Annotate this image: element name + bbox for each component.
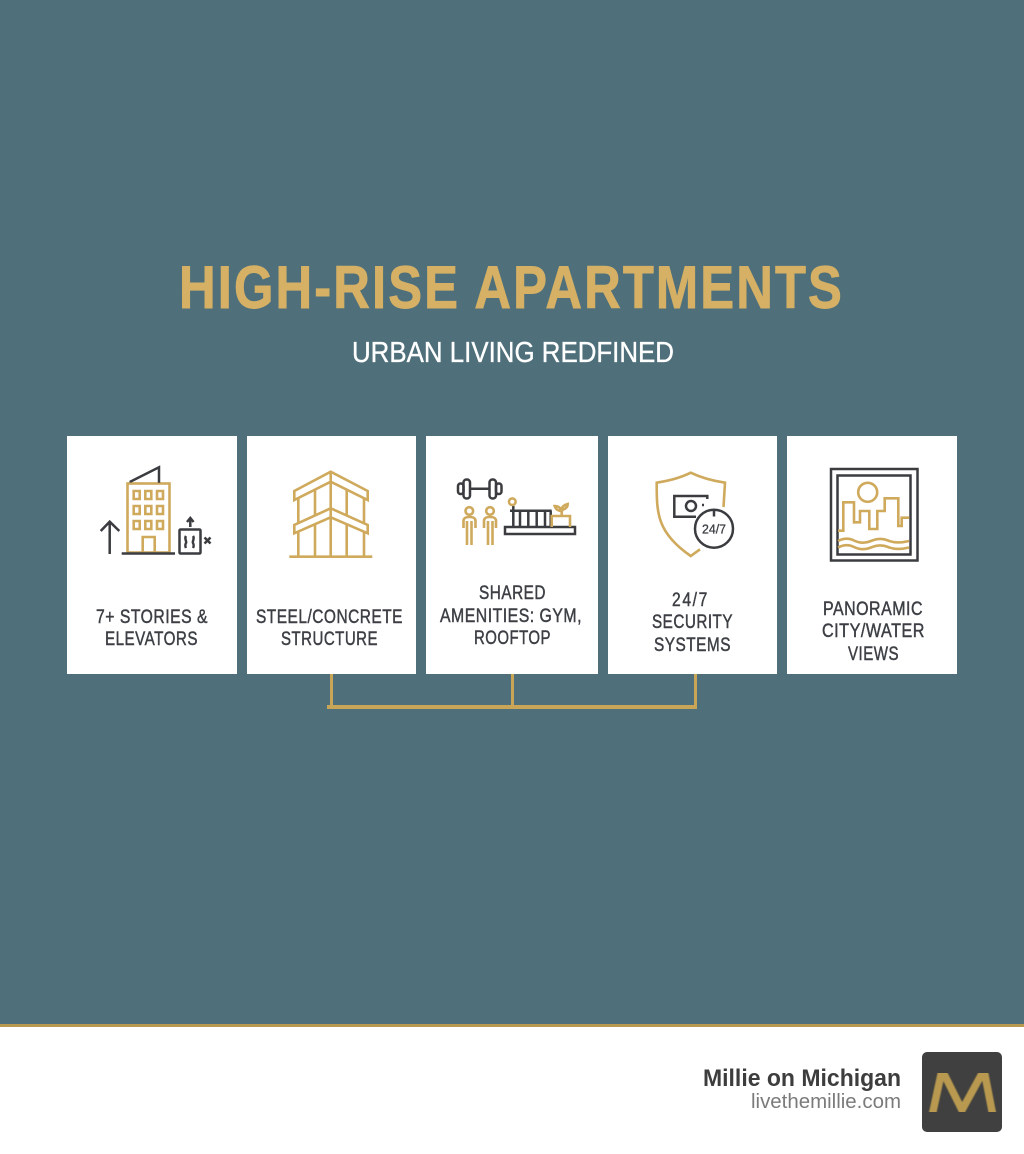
label: SECURITY: [652, 612, 733, 633]
logo: [922, 1052, 1002, 1132]
label: ROOFTOP: [474, 628, 551, 649]
icon: framed city and water view: [831, 469, 918, 560]
label: SHARED: [479, 583, 546, 604]
label: [96, 607, 208, 650]
label: CITY/WATER: [822, 621, 925, 642]
icon: building with elevator: [101, 467, 210, 554]
label: AMENITIES: GYM,: [440, 606, 582, 627]
label: ELEVATORS: [105, 629, 198, 650]
label: [652, 590, 733, 656]
panel: security systems: [608, 436, 777, 674]
label: STEEL/CONCRETE: [256, 607, 403, 628]
icon: structural frame: [289, 472, 372, 557]
icon: shield with camera and 24/7 clock: [657, 473, 733, 556]
brand name: Millie on Michigan: [703, 1065, 901, 1092]
label: [256, 607, 403, 650]
label: STRUCTURE: [281, 629, 378, 650]
footer: [0, 1024, 1024, 1154]
label: SYSTEMS: [654, 635, 731, 656]
panel: shared amenities: [426, 436, 598, 674]
label: 24/7: [672, 590, 709, 611]
panel: panoramic views: [787, 436, 957, 674]
icon: shield with camera and 24/7 clock: 24/7: [702, 522, 726, 536]
panel: 7+ stories and elevators: [67, 436, 237, 674]
label: VIEWS: [848, 644, 899, 665]
label: [822, 599, 925, 665]
subtitle: URBAN LIVING REDFINED: [352, 337, 674, 369]
title: HIGH-RISE APARTMENTS: [179, 254, 844, 321]
panel: steel and concrete structure: [247, 436, 416, 674]
label: 7+ STORIES &: [96, 607, 208, 628]
connector bracket: [327, 674, 697, 709]
label: PANORAMIC: [823, 599, 923, 620]
website: livethemillie.com: [751, 1091, 901, 1113]
icon: gym, people and rooftop: [458, 480, 575, 545]
label: [440, 583, 582, 649]
